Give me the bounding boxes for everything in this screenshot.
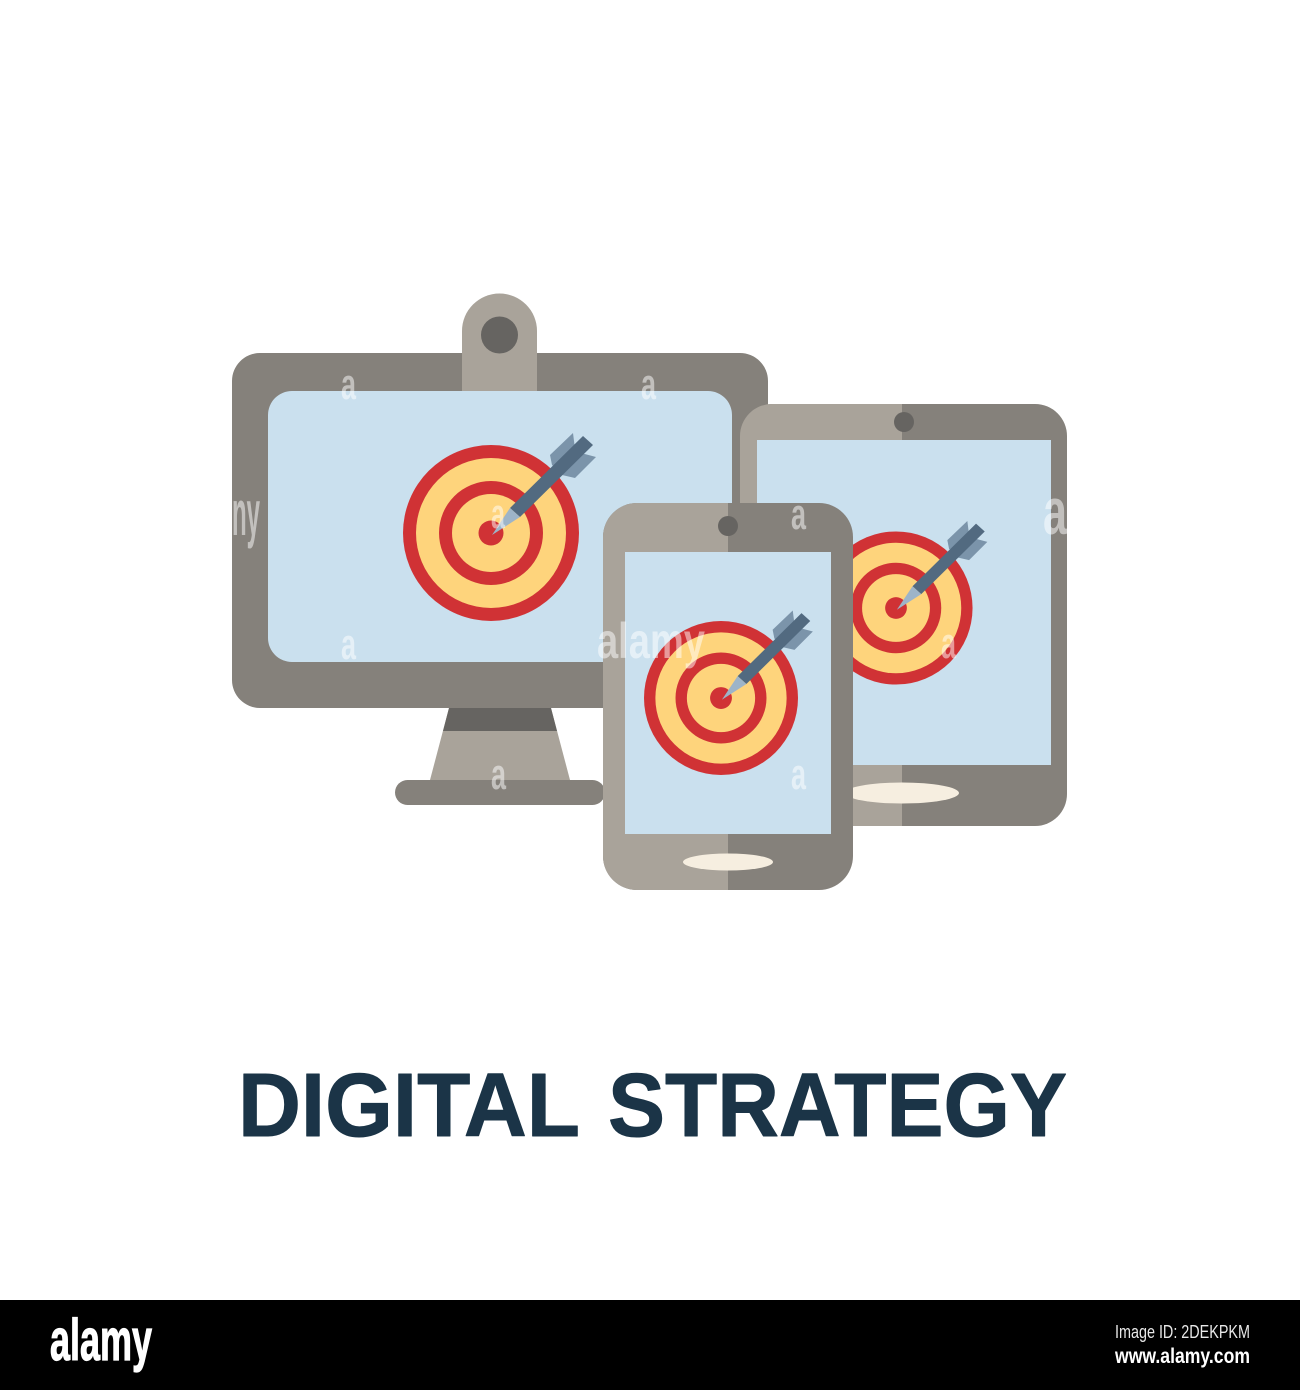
watermark letters: alamy [597, 613, 705, 669]
phone body [603, 503, 853, 890]
watermark letters: a [941, 619, 956, 668]
phone screen [625, 552, 831, 834]
icon: smartphone [603, 503, 853, 890]
footer logo: alamy [50, 1308, 152, 1373]
monitor frame [232, 353, 768, 708]
phone home button [683, 854, 773, 870]
watermark letters: a [1043, 474, 1068, 548]
icon: desktop monitor [232, 294, 768, 805]
monitor screen [268, 391, 732, 662]
footer image id: Image ID: 2DEKPKM [1115, 1322, 1250, 1342]
title: STRATEGY [608, 1056, 1067, 1156]
target on tablet [819, 521, 987, 685]
watermark letters: a [791, 490, 806, 539]
watermark letters: ny [232, 477, 260, 549]
phone camera [718, 516, 738, 536]
monitor stand [430, 708, 570, 780]
watermark letters [232, 360, 1068, 799]
footer url: www.alamy.com [1114, 1345, 1250, 1368]
target on monitor [403, 433, 596, 621]
watermark letters: a [341, 360, 356, 409]
tablet body [740, 404, 1067, 826]
tablet screen [757, 440, 1051, 765]
target on phone [644, 610, 813, 775]
footer bar [0, 1300, 1300, 1390]
tablet camera [894, 412, 914, 432]
watermark letters: a [341, 620, 356, 669]
watermark letters: a [791, 750, 806, 799]
watermark letters: a [491, 490, 505, 537]
icon: tablet [740, 404, 1067, 826]
title [238, 1056, 1067, 1156]
tablet home button [845, 782, 959, 804]
watermark letters: a [641, 360, 656, 409]
watermark letters: a [491, 750, 506, 799]
title: DIGITAL [238, 1056, 580, 1156]
monitor base [395, 780, 605, 805]
monitor webcam [462, 294, 537, 400]
